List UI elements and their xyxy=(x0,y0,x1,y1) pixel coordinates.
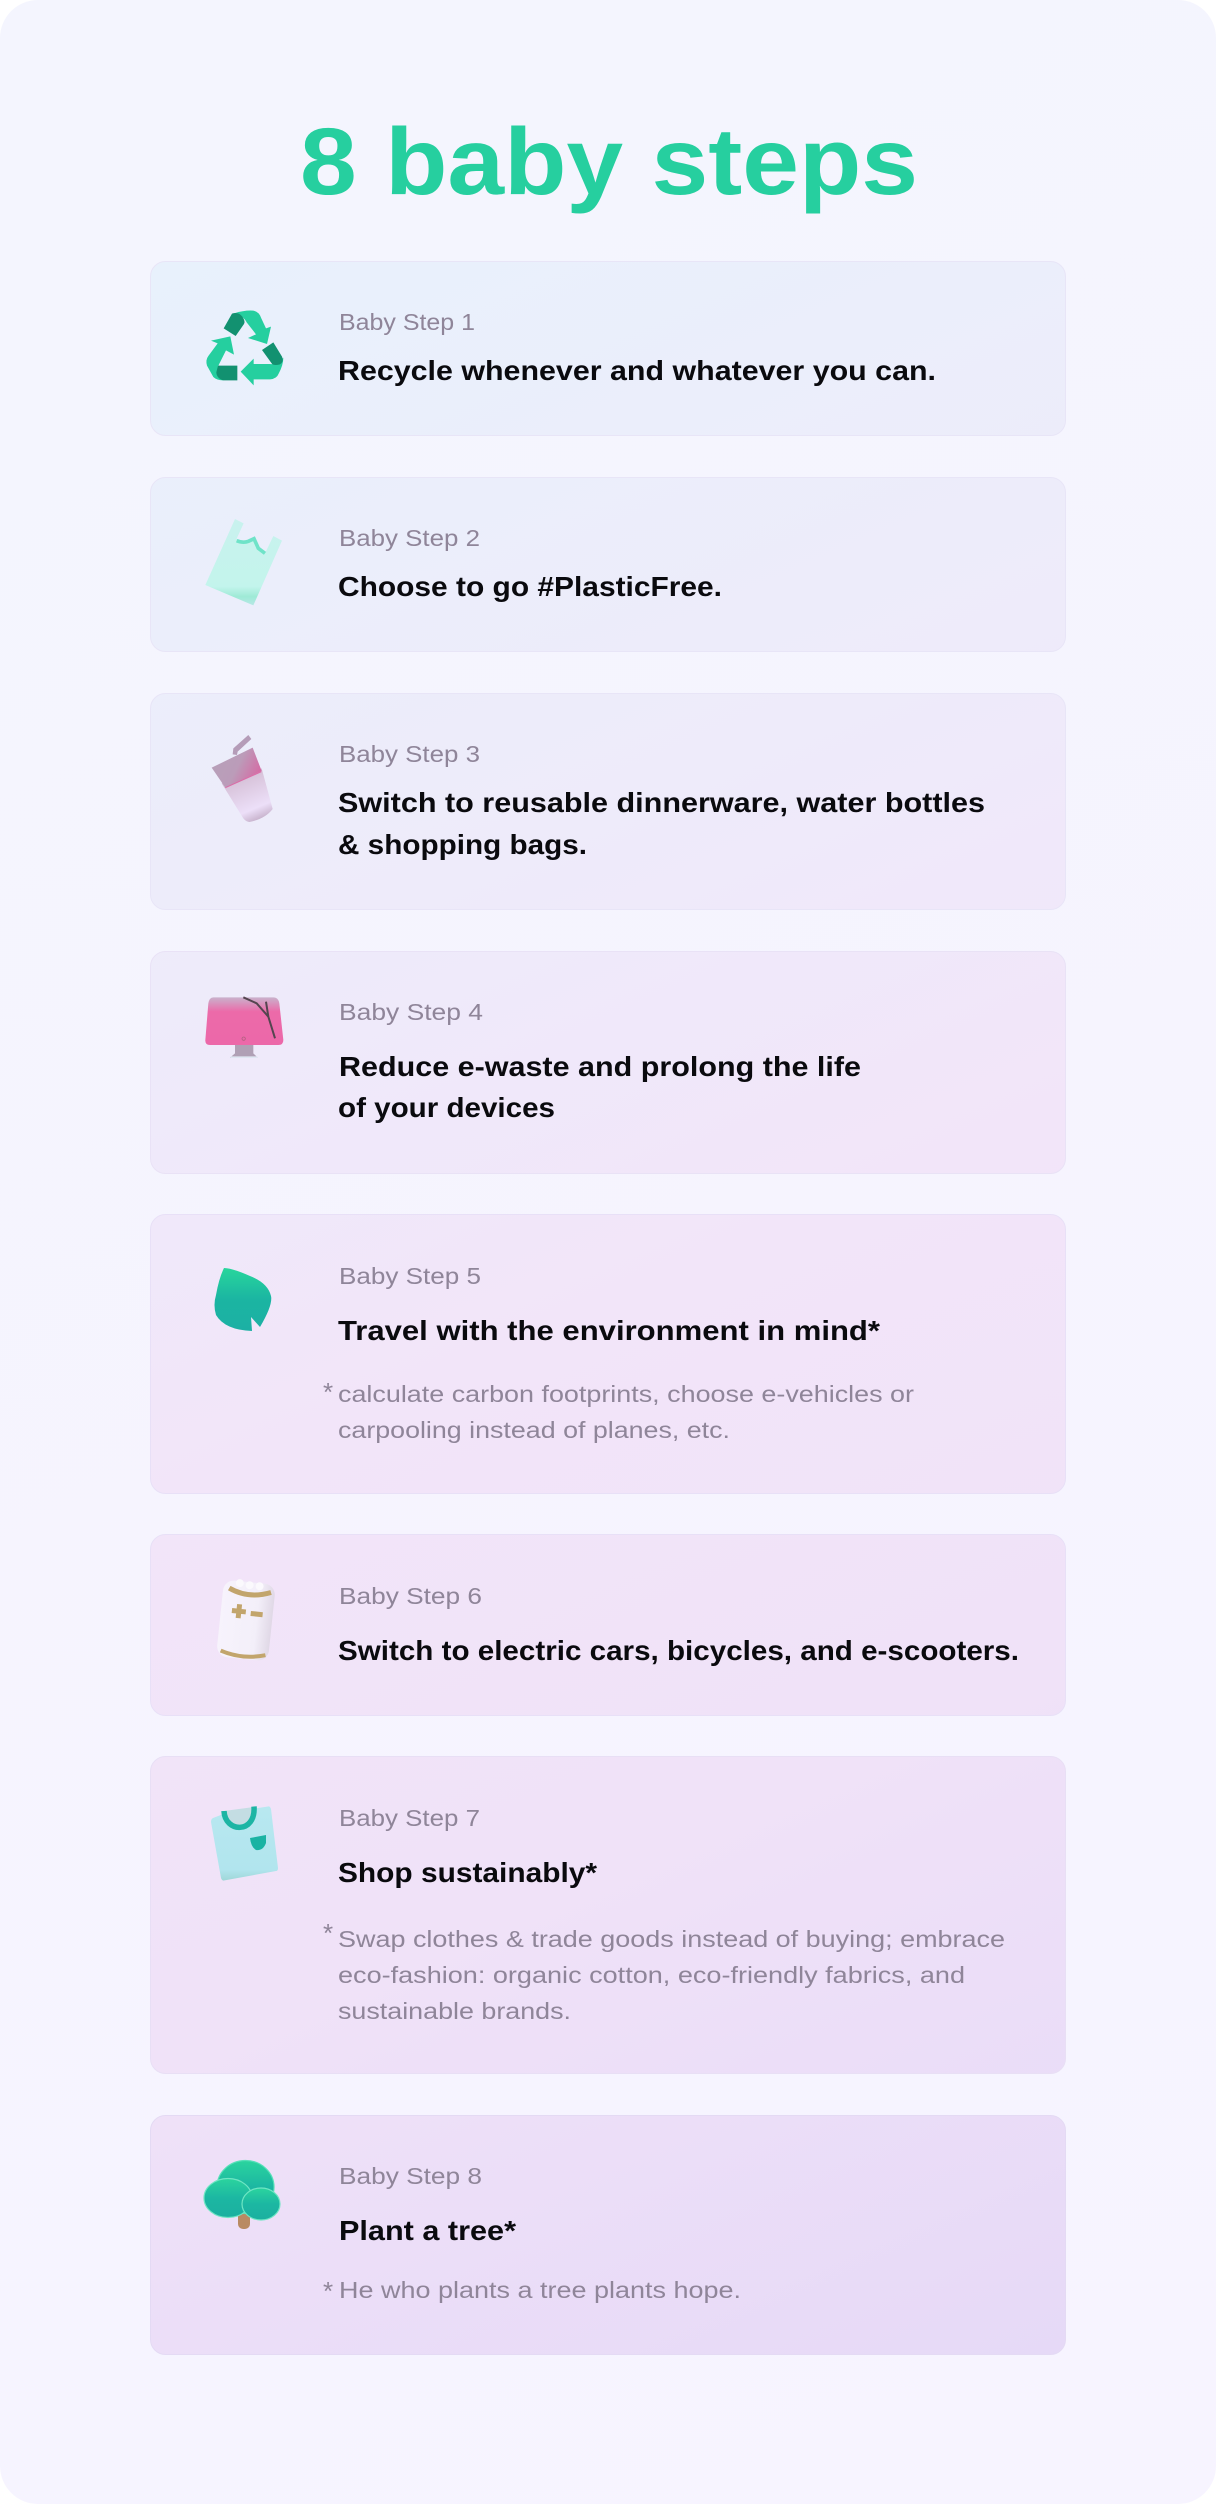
panel: baby step 6 xyxy=(150,1534,1066,1716)
step heading: Switch to electric cars, bicycles, and e-scooters. xyxy=(338,1635,1019,1666)
panel: baby step 5 xyxy=(150,1214,1066,1494)
step heading xyxy=(338,787,985,860)
footnote: eco-fashion: organic cotton, eco-friendly fabrics, and xyxy=(338,1962,965,1988)
panel: baby step 7 xyxy=(150,1756,1066,2074)
step heading xyxy=(338,1051,861,1123)
step heading: & shopping bags. xyxy=(338,829,587,860)
footnote: calculate carbon footprints, choose e-vehicles or xyxy=(338,1381,914,1407)
step label: Baby Step 2 xyxy=(339,525,480,551)
step label: Baby Step 4 xyxy=(339,999,483,1025)
icon: tree xyxy=(204,2160,280,2229)
step heading: of your devices xyxy=(338,1092,555,1123)
footnote xyxy=(323,1918,1005,2024)
panel: baby step 1 xyxy=(150,262,1066,436)
step heading: Plant a tree* xyxy=(339,2215,516,2246)
panel: baby step 2 xyxy=(150,478,1066,652)
icon: recycle arrows xyxy=(206,311,283,385)
footnote: * xyxy=(323,1918,333,1948)
footnote: carpooling instead of planes, etc. xyxy=(338,1417,730,1443)
icon: reusable cup xyxy=(212,735,273,822)
footnote: * xyxy=(323,1377,333,1407)
panel: baby step 4 xyxy=(150,952,1066,1174)
step heading: Shop sustainably* xyxy=(338,1857,597,1888)
title: 8 baby steps xyxy=(300,109,918,215)
step heading: Reduce e-waste and prolong the life xyxy=(339,1051,861,1082)
step heading: Switch to reusable dinnerware, water bottles xyxy=(338,787,985,818)
footnote: * xyxy=(323,2276,333,2306)
step heading: Recycle whenever and whatever you can. xyxy=(338,355,936,386)
step label: Baby Step 7 xyxy=(339,1805,480,1831)
footnote: He who plants a tree plants hope. xyxy=(339,2277,741,2303)
step label: Baby Step 8 xyxy=(339,2163,482,2189)
footnote xyxy=(323,1377,914,1443)
panel: baby step 3 xyxy=(150,694,1066,910)
step heading: Choose to go #PlasticFree. xyxy=(338,571,722,602)
step heading: Travel with the environment in mind* xyxy=(338,1315,880,1346)
step label: Baby Step 3 xyxy=(339,741,480,767)
footnote: Swap clothes & trade goods instead of buying; embrace xyxy=(338,1926,1005,1952)
icon: plastic bag xyxy=(205,519,282,605)
step label: Baby Step 6 xyxy=(339,1583,482,1609)
panel: baby step 8 xyxy=(150,2116,1066,2354)
icon: cracked monitor xyxy=(205,997,283,1058)
step label: Baby Step 1 xyxy=(339,309,475,335)
icon: battery xyxy=(216,1578,276,1662)
icon: leaf xyxy=(214,1268,271,1331)
footnote: sustainable brands. xyxy=(338,1998,571,2024)
step label: Baby Step 5 xyxy=(339,1263,481,1289)
icon: folded shirt xyxy=(211,1806,278,1881)
